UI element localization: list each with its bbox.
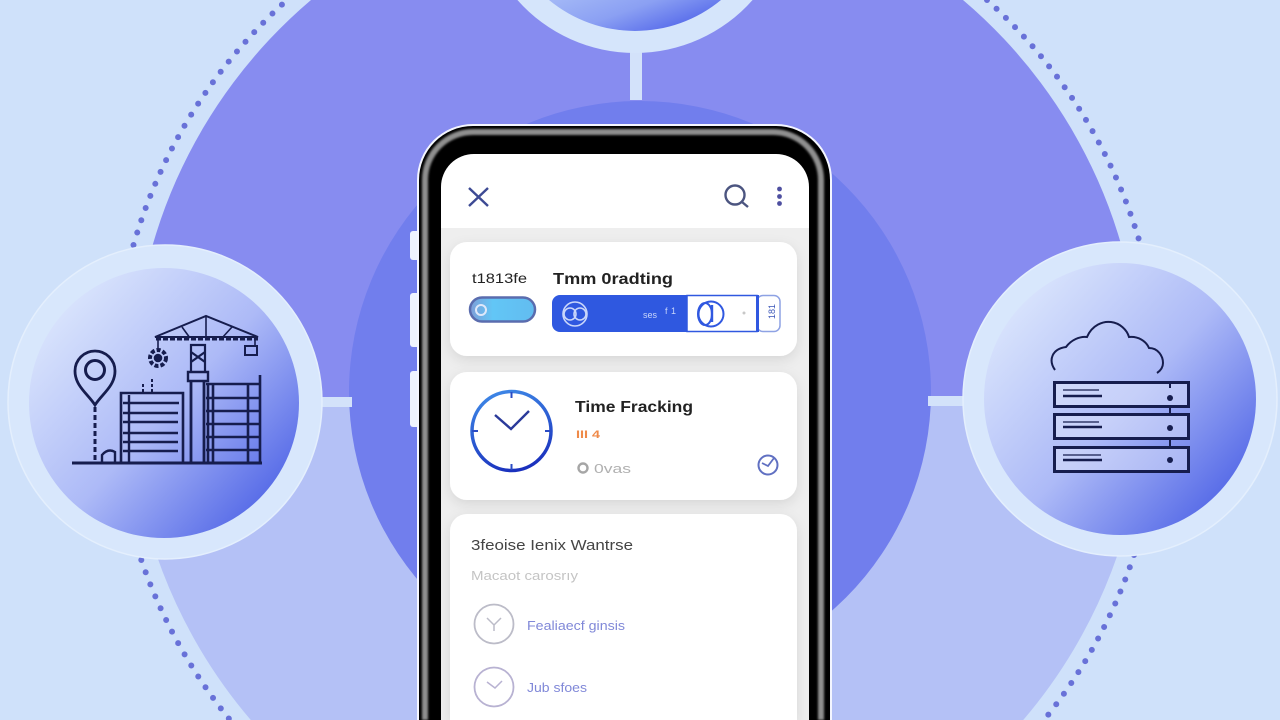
phone: [410, 124, 832, 720]
node: cloud server: [963, 242, 1277, 556]
icon: large clock: [472, 392, 551, 470]
large circle lower half: [129, 401, 1145, 720]
icon: more menu: [777, 187, 782, 206]
status row: [578, 461, 632, 476]
node: construction site: [8, 245, 322, 559]
orange value: III 4: [576, 429, 601, 441]
icon: search: [726, 186, 748, 207]
panel: time tracking card: [450, 372, 797, 500]
icon: globe: [563, 302, 587, 326]
status row: 0vas: [594, 461, 632, 476]
icon: construction site with map pin and crane: [72, 316, 262, 463]
card heading: 3feoise Ienix Wantrse: [471, 537, 633, 554]
connector: top node to inner circle: [630, 48, 642, 100]
list item 2: [474, 668, 588, 706]
card label: t1813fe: [472, 270, 527, 286]
segment rotated label: 181: [767, 304, 777, 319]
card subheading: Macaot carosrıy: [471, 568, 579, 583]
phone screen: [441, 154, 809, 720]
icon: refresh: [758, 456, 778, 474]
card heading: Time Fracking: [575, 399, 693, 416]
node: top circle: [517, 0, 753, 53]
card heading: Tmm 0radting: [553, 271, 673, 288]
icon: cloud above server stack: [1052, 322, 1188, 472]
panel: top card: [450, 242, 797, 356]
connector: right node to inner circle: [928, 396, 966, 406]
large circle upper half: [133, 0, 1141, 401]
list item 1: Fealiaecf ginsis: [527, 618, 626, 633]
panel: lower list card: [450, 514, 797, 720]
segmented control: [552, 295, 780, 332]
segment dot: [742, 312, 746, 314]
toggle pill: [470, 298, 535, 322]
segment small label: ses: [643, 310, 658, 320]
icon: round badge: [698, 302, 724, 326]
connector: left node to inner circle: [318, 397, 352, 407]
list item 1: [474, 604, 626, 644]
phone body: [417, 124, 832, 720]
list item 2: Jub sfoes: [527, 680, 588, 695]
inner circle behind phone: [349, 101, 931, 683]
phone side buttons: [410, 231, 422, 427]
segment small value: f1: [665, 306, 676, 316]
dotted orbit ring: [134, 0, 1140, 720]
icon: close: [469, 188, 488, 206]
